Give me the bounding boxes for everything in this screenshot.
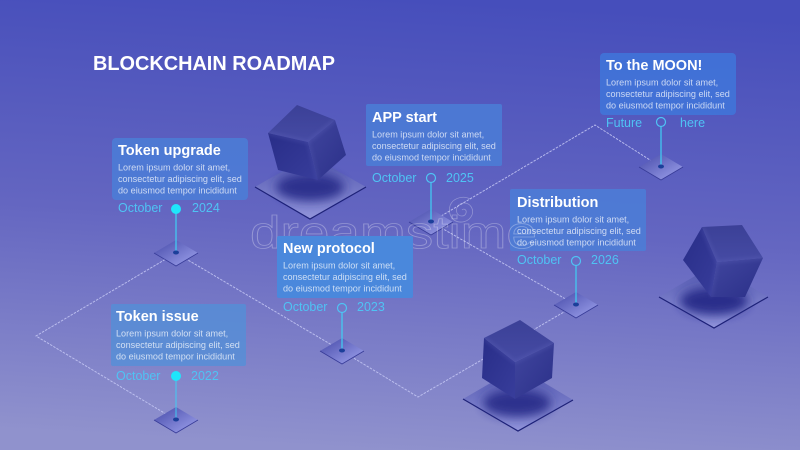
dashed roadmap path bbox=[36, 125, 661, 420]
heading: APP start: APP start bbox=[372, 110, 437, 126]
body: Token issue: consectetur adipiscing elit, sed bbox=[116, 340, 240, 350]
marker pin bbox=[572, 256, 580, 306]
date: Future here: here bbox=[680, 116, 705, 130]
marker pin bbox=[171, 204, 181, 254]
body: APP start: consectetur adipiscing elit, sed bbox=[372, 141, 496, 151]
card: Token upgrade bbox=[112, 138, 248, 200]
body: New protocol: do eiusmod tempor incididunt bbox=[283, 284, 402, 294]
milestone: Token upgrade bbox=[112, 138, 248, 266]
body: APP start: Lorem ipsum dolor sit amet, bbox=[372, 130, 484, 140]
body: Distribution: Lorem ipsum dolor sit amet, bbox=[517, 214, 629, 224]
marker platform bbox=[320, 338, 364, 364]
date: October 2025: October bbox=[372, 171, 416, 185]
date: October 2023: October bbox=[283, 300, 327, 314]
body: APP start: do eiusmod tempor incididunt bbox=[372, 152, 491, 162]
date: October 2024: October bbox=[118, 201, 162, 215]
heading: New protocol: New protocol bbox=[283, 241, 375, 257]
date: October 2024: 2024 bbox=[192, 201, 220, 215]
body: Distribution: do eiusmod tempor incididunt bbox=[517, 238, 636, 248]
marker platform bbox=[409, 209, 453, 235]
marker pin bbox=[426, 174, 436, 224]
isometric cube: right bbox=[659, 225, 768, 328]
card: New protocol bbox=[277, 236, 413, 298]
date: October 2026: October bbox=[517, 253, 561, 267]
marker pin bbox=[171, 371, 181, 422]
card: Token issue bbox=[111, 304, 246, 366]
body: Distribution: consectetur adipiscing elit, sed bbox=[517, 226, 641, 236]
watermark: dreamstime bbox=[250, 207, 537, 258]
marker platform bbox=[554, 292, 598, 318]
marker platform bbox=[639, 154, 683, 180]
body: To the MOON!: consectetur adipiscing elit, sed bbox=[606, 89, 730, 99]
marker platform bbox=[154, 240, 198, 266]
body: Token upgrade: do eiusmod tempor incididunt bbox=[118, 186, 237, 196]
date: October 2026: 2026 bbox=[591, 253, 619, 267]
heading: Token upgrade: Token upgrade bbox=[118, 143, 221, 159]
isometric cube: bottom centre bbox=[463, 320, 573, 431]
body: New protocol: Lorem ipsum dolor sit amet, bbox=[283, 260, 395, 270]
date: October 2022: October bbox=[116, 369, 160, 383]
card: To the MOON! bbox=[600, 53, 736, 115]
heading: Distribution: Distribution bbox=[517, 195, 598, 211]
body: To the MOON!: Lorem ipsum dolor sit amet, bbox=[606, 78, 718, 88]
date: Future here: Future bbox=[606, 116, 642, 130]
milestone: Distribution bbox=[510, 189, 646, 318]
marker pin bbox=[338, 304, 346, 352]
date: October 2025: 2025 bbox=[446, 171, 474, 185]
body: Token upgrade: Lorem ipsum dolor sit amet, bbox=[118, 162, 230, 172]
marker platform bbox=[154, 407, 198, 433]
date: October 2023: 2023 bbox=[357, 300, 385, 314]
date: October 2022: 2022 bbox=[191, 369, 219, 383]
milestone: Token issue bbox=[111, 304, 246, 433]
body: Token issue: Lorem ipsum dolor sit amet, bbox=[116, 328, 228, 338]
milestone: APP start bbox=[366, 104, 502, 235]
body: New protocol: consectetur adipiscing elit, sed bbox=[283, 272, 407, 282]
card: Distribution bbox=[510, 189, 646, 251]
title: BLOCKCHAIN ROADMAP bbox=[93, 53, 335, 75]
card: APP start bbox=[366, 104, 502, 166]
watermark bbox=[250, 197, 537, 258]
isometric cube: top left bbox=[255, 105, 366, 219]
milestone: New protocol bbox=[277, 236, 413, 364]
marker pin bbox=[656, 118, 666, 168]
body: Token issue: do eiusmod tempor incididunt bbox=[116, 352, 235, 362]
milestone: To the MOON! bbox=[600, 53, 736, 180]
body: To the MOON!: do eiusmod tempor incididunt bbox=[606, 100, 725, 110]
heading: Token issue: Token issue bbox=[116, 309, 199, 325]
heading: To the MOON!: To the MOON! bbox=[606, 58, 702, 74]
body: Token upgrade: consectetur adipiscing elit, sed bbox=[118, 174, 242, 184]
